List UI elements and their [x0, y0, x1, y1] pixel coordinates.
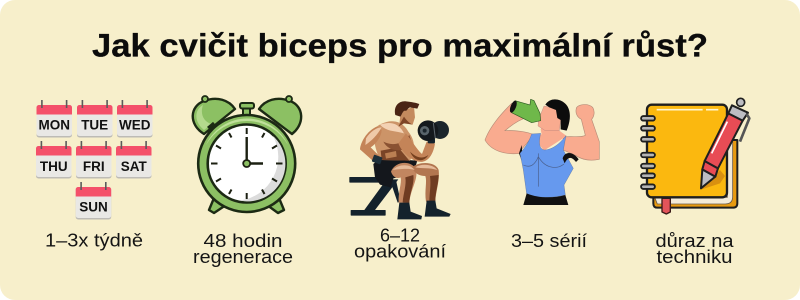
icon: notebook and pen [643, 98, 749, 214]
clock body [198, 115, 295, 212]
pages [655, 140, 733, 204]
shorts [373, 158, 417, 187]
label: regeneration [193, 231, 293, 267]
icon: weekly calendars [36, 100, 152, 220]
front cover [647, 105, 727, 197]
face [538, 106, 561, 131]
dumbbell [418, 120, 449, 141]
pen [701, 98, 749, 189]
shorts [523, 193, 568, 205]
icon: alarm clock [193, 96, 301, 213]
icon: bodybuilder on a bench [349, 101, 451, 219]
armband [563, 153, 579, 163]
back cover [653, 140, 737, 208]
label: sets: 3–5 sérií [511, 231, 587, 251]
label: regeneration: 48 hodin [204, 231, 282, 251]
title: Jak cvičit biceps pro maximální růst? [92, 28, 708, 64]
clock bells [193, 99, 235, 134]
clock face [208, 124, 286, 202]
left arm [360, 127, 382, 161]
spiral rings [643, 118, 653, 187]
head [399, 107, 415, 125]
neck and chest [532, 110, 567, 151]
label: frequency: 1–3x týdně [45, 230, 143, 250]
calendar: Sunday: SUN [79, 200, 108, 214]
label: regeneration: regenerace [193, 247, 293, 267]
calendar: Wednesday: WED [119, 118, 151, 132]
bookmark ribbon [662, 198, 670, 214]
wrist wrap [372, 155, 383, 164]
hair [395, 101, 419, 117]
flexed arm [563, 105, 599, 160]
calendar: Thursday: THU [40, 159, 68, 174]
legs [391, 163, 416, 203]
label: technique [656, 231, 735, 267]
torso [374, 121, 414, 161]
shaker [508, 99, 541, 123]
raised arm with shaker [485, 103, 534, 154]
label: repetitions [354, 226, 446, 262]
tank top [520, 133, 573, 197]
clock top knob [243, 106, 250, 116]
calendar: Monday: MON [39, 118, 70, 132]
calendar: Friday: FRI [83, 159, 105, 174]
label: technique: techniku [656, 247, 732, 267]
hair [545, 99, 570, 131]
bench [349, 177, 401, 216]
icon: man drinking from a shaker [485, 99, 599, 205]
calendar: Saturday: SAT [121, 159, 148, 174]
label: technique: důraz na [656, 231, 735, 251]
right arm [398, 133, 435, 162]
label: repetitions: 6–12 [380, 226, 420, 246]
calendar: Tuesday: TUE [81, 118, 108, 132]
clock ticks [211, 128, 282, 199]
clock hands [247, 137, 263, 164]
shoes [397, 203, 422, 219]
label: repetitions: opakování [354, 242, 446, 262]
black side [519, 145, 523, 165]
hand [428, 137, 435, 143]
clock legs [209, 198, 284, 213]
